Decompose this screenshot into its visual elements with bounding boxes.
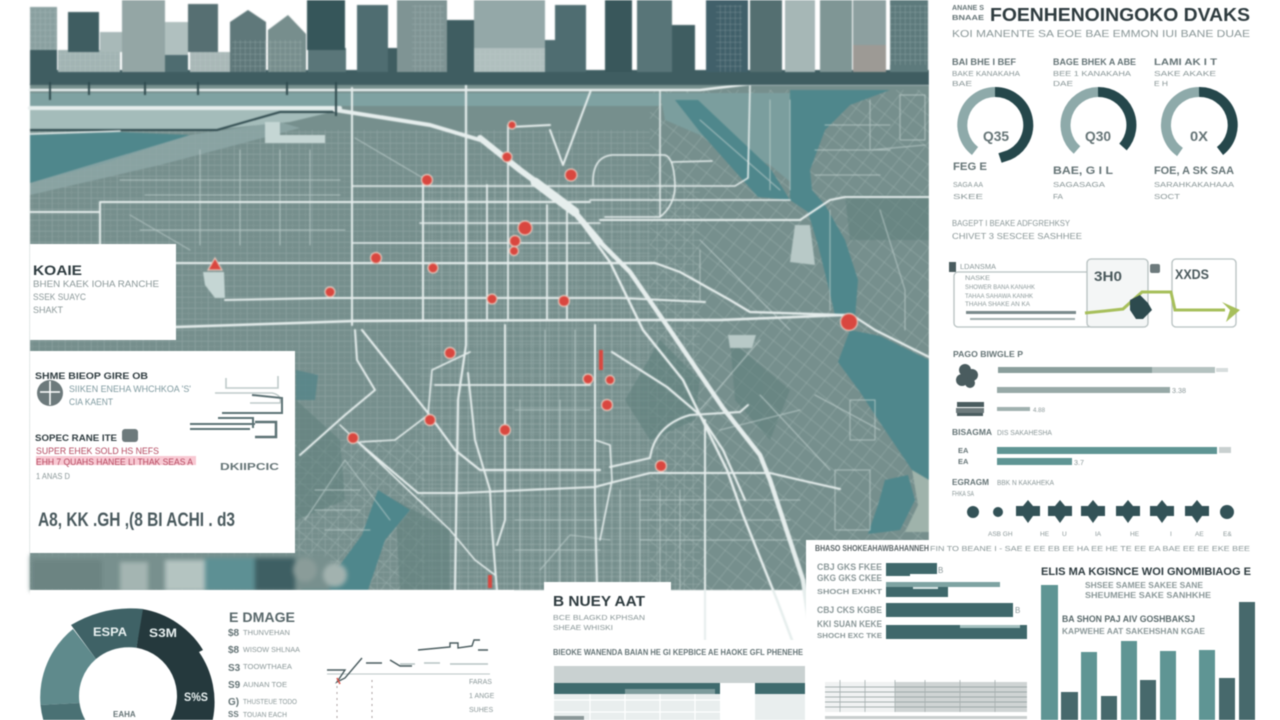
icon: badge: [1150, 264, 1160, 273]
gauge: second metric: BEE 1 KANAKAHA: [1053, 69, 1131, 78]
heading: E DMAGE: [229, 609, 295, 625]
text block: [553, 613, 645, 632]
text block: footer line: FIN TO BEANE I - SAE E EE EB EE HA EE HE TE EE EA BAE EE EE EKE BEE: [930, 546, 1250, 553]
text block: [69, 384, 191, 407]
panel: route summary title: [544, 582, 671, 642]
heading: BHASO SHOKEAHAWBAHANNEH: [815, 544, 929, 553]
chart labels: FARAS: [469, 679, 492, 686]
small heading tag: ANANE S: [952, 5, 984, 12]
bar group: first: [953, 349, 1228, 416]
legend: TOUAN EACH: [243, 712, 287, 719]
gauge: second metric: BAE, G I L: [1053, 165, 1113, 177]
figures: A8, KK .GH ,(8 BI ACHI . d3: [38, 510, 235, 531]
water: right bay: [838, 330, 929, 480]
gauge: first metric: BAKE KANAKAHA: [952, 69, 1020, 78]
panel: donut and usage: [30, 590, 514, 720]
heading: KOAIE: [33, 262, 82, 278]
legend: THUSTEUE TODO: [243, 697, 297, 706]
panel: right column background: [929, 0, 1280, 555]
gauge: first metric: Q35: [983, 128, 1009, 144]
donut chart: [40, 608, 215, 720]
water: diagonal river: [675, 100, 790, 200]
bar labels: GKG GKS CKEE: [817, 573, 882, 583]
icon row: interchanges: AE: [1195, 531, 1204, 538]
bar labels: CBJ CKS KGBE: [817, 605, 882, 615]
text block: CIA KAENT: [69, 397, 113, 407]
gauge: third metric: E H: [1154, 79, 1168, 88]
bar labels: [817, 562, 883, 640]
small heading tag: [952, 5, 984, 22]
chart labels: SUHES: [469, 707, 493, 714]
heading: SHME BIEOP GIRE OB: [35, 371, 149, 381]
water: upper left bay: [30, 132, 190, 183]
flow diagram: NASKE: [965, 276, 990, 282]
people photo strip: [30, 555, 347, 592]
heading: SOPEC RANE ITE: [35, 433, 117, 443]
table caption: BIEOKE WANENDA BAIAN HE GI KEPBICE AE HAOKE GFL PHENEHE: [553, 648, 804, 657]
arrow: green flow line: [1085, 292, 1225, 313]
bar labels: SHOCH EXHKT: [817, 589, 883, 596]
bar group: second: BISAGMA: [952, 427, 992, 437]
legend: AUNAN TOE: [243, 680, 287, 689]
icon row: interchanges: ASB GH: [988, 531, 1013, 538]
subtitle: KOI MANENTE SA EOE BAE EMMON IUI BANE DUAE: [952, 29, 1250, 40]
text block: gauge notes: [952, 219, 1082, 241]
chart labels: 1 ANGE: [469, 693, 495, 700]
gauge: second metric: FA: [1053, 192, 1063, 201]
donut chart: ESPA: [93, 625, 127, 639]
box: first value: 3H0: [1094, 268, 1122, 284]
pale plaza: [265, 122, 325, 143]
icon: cluster top: [956, 364, 978, 388]
gauge: first metric: BAI BHE I BEF: [952, 57, 1016, 68]
text block: SHAKT: [33, 305, 63, 315]
title: FOENHENOINGOKO DVAKS: [990, 5, 1250, 25]
text block: KAPWEHE AAT SAKEHSHAN KGAE: [1062, 627, 1206, 636]
gauge: second metric: Q30: [1085, 128, 1111, 144]
text block: SHEAE WHISKI: [553, 623, 613, 632]
bars: B: [1015, 606, 1020, 615]
icon: cluster bottom: [956, 402, 984, 416]
text block: [1085, 581, 1212, 600]
panel: horizontal bar comparison: [806, 540, 1040, 720]
shore: [905, 470, 929, 532]
text block: SHEUMEHE SAKE SANHKHE: [1085, 591, 1212, 600]
legend: SS: [228, 710, 239, 719]
pale lake: [203, 272, 225, 298]
legend: TOOWTHAEA: [243, 662, 292, 671]
donut chart: S3M: [149, 626, 177, 640]
gauge: third metric: 0X: [1190, 128, 1209, 144]
donut chart: S%S: [184, 690, 208, 704]
alert text: SUPER EHEK SOLD HS NEFS: [36, 446, 159, 456]
major roads: [30, 84, 929, 640]
panel: route table: [544, 640, 806, 720]
pale upper band: [30, 93, 660, 106]
panel: transit notes: [30, 351, 295, 553]
icon row: interchanges: FHKA SA: [952, 491, 974, 498]
water: main river: [790, 90, 890, 318]
text block: BCE BLAGKD KPHSAN: [553, 613, 645, 622]
alert text: [36, 446, 196, 467]
minor roads: [120, 95, 925, 590]
legend: $8: [228, 628, 240, 639]
text block: SHSEE SAMEE SAKEE SANE: [1085, 581, 1204, 590]
bar group: second: 3.7: [1074, 460, 1084, 467]
text block: gauge notes: CHIVET 3 SESCEE SASHHEE: [952, 232, 1082, 241]
bars: B: [938, 566, 943, 575]
gauge: second metric: DAE: [1053, 79, 1073, 88]
bar group: second: DIS SAKAHESHA: [997, 430, 1052, 437]
flow diagram: TAHAA SAHAWA KANHK: [965, 294, 1033, 300]
bars: [886, 563, 1027, 639]
text block: [33, 279, 159, 315]
bridge piers: [50, 82, 336, 116]
text block: 1 ANAS D: [36, 472, 70, 481]
gauge: first metric: BAE: [952, 79, 972, 88]
gauge: first metric: SAGA AA: [953, 180, 983, 189]
box: list: [954, 272, 1147, 327]
donut chart: EAHA: [113, 710, 136, 719]
legend: WISOW SHLNAA: [243, 645, 300, 654]
legend: S9: [228, 680, 241, 691]
gauge: first metric: SKEE: [953, 192, 983, 201]
chart labels: [469, 679, 495, 714]
bay shore band: [30, 122, 300, 195]
text block: LDANSMA: [960, 264, 996, 271]
small heading tag: BNAAE: [952, 15, 984, 22]
bar group: second: EA: [958, 446, 969, 455]
label: DKIIPCIC: [220, 462, 279, 473]
box: second value: [1172, 259, 1236, 327]
pale low-rise base: [58, 48, 545, 72]
icon: badge: [122, 429, 138, 442]
city map: [30, 84, 929, 640]
text block: BHEN KAEK IOHA RANCHE: [33, 279, 159, 289]
icon row: interchanges: HE: [1040, 531, 1050, 538]
darker vegetation patches: [296, 195, 929, 590]
heading: ELIS MA KGISNCE WOI GNOMIBIAOG E: [1041, 566, 1251, 578]
flow diagram: SHOWER BANA KANAHK: [965, 285, 1035, 291]
gauge: second metric: BAGE BHEK A ABE: [1053, 57, 1136, 68]
text block: SSEK SUAYC: [33, 292, 86, 302]
bar group: first: 3.38: [1172, 388, 1186, 395]
table: [554, 666, 805, 720]
pale ponds: [728, 225, 815, 348]
bar group: first: 4.88: [1033, 407, 1045, 414]
flow diagram: [949, 259, 1240, 327]
icon row: interchanges: IA: [1095, 531, 1102, 538]
icon row: interchanges: [952, 477, 1234, 538]
box: first value: [1087, 259, 1148, 327]
panel: column chart: [1040, 555, 1280, 720]
gauge: first metric: FEG E: [953, 161, 987, 173]
incident markers: [208, 121, 858, 588]
gauge: third metric: LAMI AK I T: [1154, 57, 1217, 68]
bar group: second: EA: [958, 457, 969, 466]
icon row: interchanges: E&: [1223, 531, 1232, 538]
gauge: third metric: SOCT: [1154, 192, 1181, 201]
upper right teal area: [660, 93, 800, 190]
water: lower lake: [300, 490, 410, 590]
window texture: [30, 5, 928, 72]
bar labels: KKI SUAN KEKE: [817, 619, 882, 629]
gauge: third metric: SARAHKAKAHAAA: [1154, 180, 1234, 189]
bars: [1041, 585, 1255, 720]
text block: gauge notes: BAGEPT I BEAKE ADFGREHKSY: [952, 219, 1071, 228]
bar labels: CBJ GKS FKEE: [817, 562, 882, 572]
gauge: second metric: [1053, 57, 1136, 201]
panel: road key: [30, 244, 176, 340]
legend: $8: [228, 645, 240, 656]
icon row: interchanges: I: [1170, 531, 1172, 538]
sketch: interchange: [190, 376, 282, 437]
bar group: first: PAGO BIWGLE P: [953, 349, 1023, 359]
data table: [825, 680, 1027, 719]
text block: SIIKEN ENEHA WHCHKOA 'S': [69, 384, 191, 394]
icon row: interchanges: EGRAGM: [952, 477, 989, 487]
skyline: [30, 0, 929, 116]
icon row: interchanges: U: [1062, 531, 1067, 538]
legend: THUNVEHAN: [243, 628, 290, 637]
icon: green arrow head: [1222, 302, 1240, 322]
icon row: interchanges: HE: [1130, 531, 1140, 538]
water: small pond: [296, 370, 318, 400]
legend: [228, 628, 300, 719]
alert text: EHH 7 QUAHS HANEE LI THAK SEAS A: [36, 457, 193, 467]
gauge: third metric: FOE, A SK SAA: [1154, 165, 1234, 177]
line chart: [327, 640, 490, 720]
flow diagram: THAHA SHAKE AN KA: [965, 302, 1030, 308]
bar labels: SHOCH EXC TKE: [817, 633, 882, 640]
panel: title block: [952, 5, 1250, 40]
bar group: second: [952, 427, 1231, 467]
towers: [30, 0, 928, 72]
gauge: third metric: SAKE AKAKE: [1154, 69, 1216, 78]
gauge: first metric: [952, 57, 1028, 201]
water: lower right inlet: [868, 475, 915, 534]
box: second value: XXDS: [1175, 266, 1209, 282]
icon: brain: [37, 380, 63, 406]
gauge: second metric: SAGASAGA: [1053, 180, 1105, 189]
text block: BA SHON PAJ AIV GOSHBAKSJ: [1062, 614, 1195, 625]
legend: S3: [228, 663, 241, 674]
icon: dark interchange: [1130, 295, 1152, 319]
heading: B NUEY AAT: [553, 593, 645, 610]
icon: key: [949, 262, 956, 272]
gauge: third metric: [1154, 57, 1234, 201]
icon row: interchanges: BBK N KAKAHEKA: [997, 480, 1054, 487]
legend: G): [228, 697, 239, 708]
